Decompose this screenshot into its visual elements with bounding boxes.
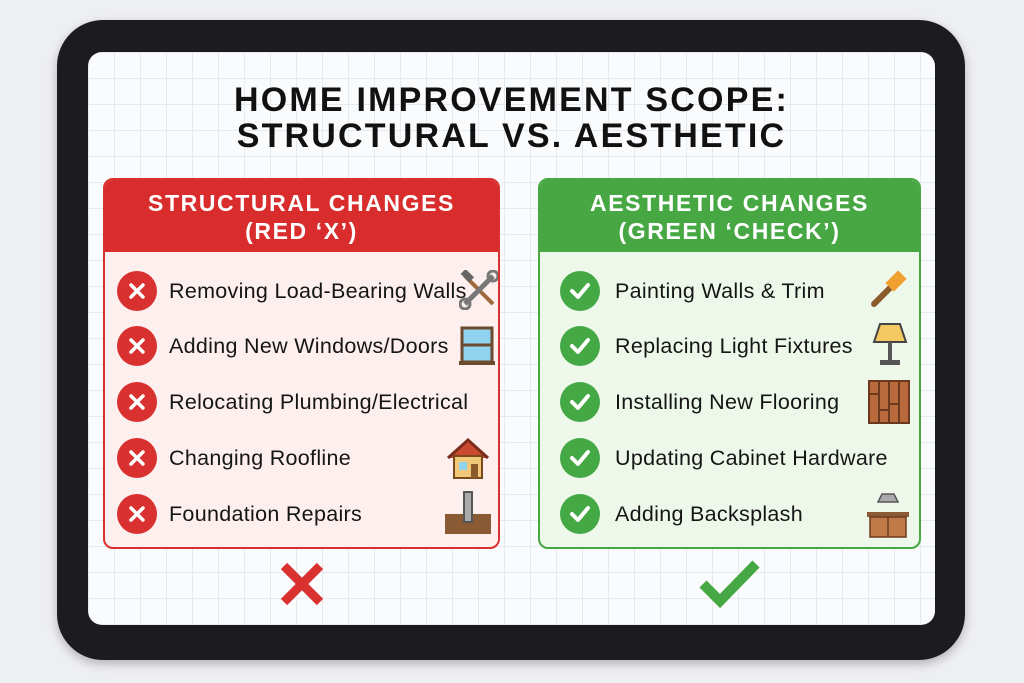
item: windows: Adding New Windows/Doors <box>169 334 449 358</box>
item: windows <box>117 326 449 366</box>
item: roofline <box>117 438 351 478</box>
item: removing walls: Removing Load-Bearing Walls <box>169 278 467 302</box>
item: removing walls <box>117 271 467 311</box>
item: foundation <box>117 494 362 534</box>
item: flooring <box>560 382 839 422</box>
heading: aesthetic: (GREEN ‘CHECK’) <box>618 218 841 244</box>
heading: aesthetic <box>540 180 919 252</box>
heading: structural <box>105 180 498 252</box>
icon: paintbrush <box>871 270 906 307</box>
icon: tools <box>459 270 498 310</box>
item: plumbing: Relocating Plumbing/Electrical <box>169 390 468 414</box>
heading: structural: (RED ‘X’) <box>245 218 358 244</box>
item: cabinet hardware: Updating Cabinet Hardware <box>615 446 888 470</box>
item: roofline: Changing Roofline <box>169 446 351 470</box>
item: painting <box>560 271 825 311</box>
heading: aesthetic: AESTHETIC CHANGES <box>590 190 869 216</box>
item: light fixtures: Replacing Light Fixtures <box>615 334 853 358</box>
item: backsplash: Adding Backsplash <box>615 502 803 526</box>
tablet screen <box>88 52 935 625</box>
item: flooring: Installing New Flooring <box>615 390 839 414</box>
icon: big red X <box>280 562 324 606</box>
item: plumbing <box>117 382 468 422</box>
panel: structural changes <box>103 178 500 549</box>
item: cabinet hardware <box>560 438 888 478</box>
title <box>234 81 789 155</box>
item: foundation: Foundation Repairs <box>169 502 362 526</box>
title: HOME IMPROVEMENT SCOPE: <box>234 81 789 119</box>
icon: foundation <box>445 491 491 534</box>
item: painting: Painting Walls & Trim <box>615 278 825 302</box>
icon: big green check <box>700 560 760 608</box>
heading: structural: STRUCTURAL CHANGES <box>148 190 455 216</box>
icon: lamp <box>872 323 908 365</box>
icon: flooring <box>868 380 910 424</box>
item: light fixtures <box>560 326 853 366</box>
panel: aesthetic changes <box>538 178 921 549</box>
icon: kitchen cabinet <box>867 493 909 538</box>
item: backsplash <box>560 494 803 534</box>
icon: house <box>447 438 489 479</box>
icon: window <box>459 326 495 365</box>
title: STRUCTURAL VS. AESTHETIC <box>237 117 786 155</box>
